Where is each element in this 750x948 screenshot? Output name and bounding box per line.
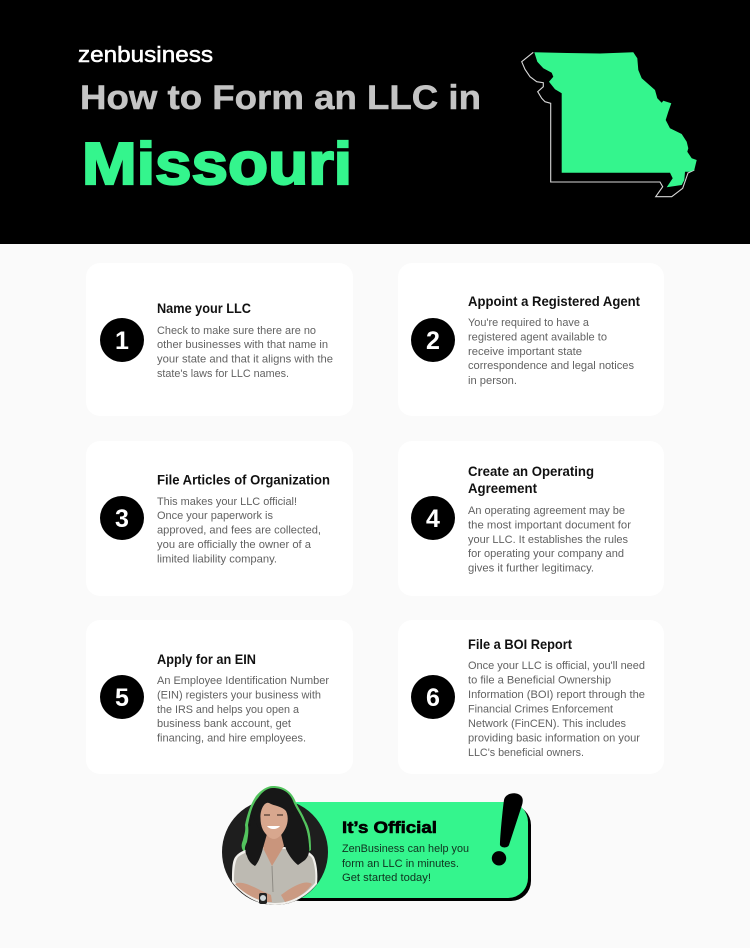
heading: Name your LLC: Name your LLC	[157, 301, 251, 316]
text block: step 3: limited liability company.	[157, 554, 277, 566]
text block: step 4: An operating agreement may be	[468, 505, 625, 517]
text block: step 2: receive important state	[468, 346, 582, 358]
panel: step 6	[398, 620, 664, 774]
text block: step 1: state's laws for LLC names.	[157, 368, 289, 380]
text block: step 4: your LLC. It establishes the rules	[468, 534, 628, 546]
icon: exclamation mark	[492, 793, 523, 866]
heading: File Articles of Organization: File Articles of Organization	[157, 472, 330, 488]
number badge 2: 2	[426, 327, 440, 355]
text block: step 1	[157, 325, 333, 380]
number badge 3	[100, 496, 144, 540]
text block: step 6: Once your LLC is official, you'll need	[468, 660, 645, 672]
panel: step 1	[86, 263, 353, 416]
callout text	[342, 843, 469, 884]
number badge 3: 3	[115, 505, 129, 533]
text block: step 2: You're required to have a	[468, 317, 590, 329]
text block: step 1: other businesses with that name in	[157, 339, 328, 351]
wristwatch	[259, 893, 267, 904]
text block: step 3	[157, 496, 321, 566]
number badge 1	[100, 318, 144, 362]
number badge 5: 5	[115, 684, 129, 712]
title line: How to Form an LLC in	[80, 79, 481, 117]
text block: step 5: An Employee Identification Number	[157, 675, 329, 687]
text block: step 3: approved, and fees are collected,	[157, 524, 321, 536]
text block: step 4: the most important document for	[468, 520, 631, 532]
text block: step 5	[157, 675, 329, 744]
number badge 6: 6	[426, 684, 440, 712]
text block: step 6	[468, 660, 645, 759]
callout text: Get started today!	[342, 872, 431, 884]
text block: step 4	[468, 505, 631, 574]
front hair locks	[245, 812, 309, 866]
heading: It's Official: It’s Official	[342, 818, 437, 837]
text block: step 6: to file a Beneficial Ownership	[468, 674, 611, 686]
icon: Missouri map	[522, 52, 697, 197]
hair glow	[242, 786, 311, 858]
text block: step 6: Financial Crimes Enforcement	[468, 704, 614, 716]
text block: step 4: for operating your company and	[468, 548, 624, 560]
panel: step 4	[398, 441, 664, 596]
face	[260, 803, 288, 839]
text block: step 5: business bank account, get	[157, 718, 292, 730]
text block: step 2: correspondence and legal notices	[468, 360, 634, 372]
title: Missouri: Missouri	[82, 131, 352, 197]
portrait: smiling woman	[222, 786, 328, 905]
callout text: form an LLC in minutes.	[342, 858, 459, 870]
callout text: ZenBusiness can help you	[342, 843, 469, 855]
number badge 1: 1	[115, 327, 129, 355]
text block: step 6: Network (FinCEN). This includes	[468, 718, 626, 730]
text block: step 5: the IRS and helps you open a	[157, 704, 300, 716]
text block: step 3: This makes your LLC official!	[157, 496, 297, 508]
text block: step 5: (EIN) registers your business with	[157, 690, 321, 702]
callout: It's Official	[222, 786, 531, 905]
text block: step 3: Once your paperwork is	[157, 510, 273, 522]
text block: step 4: gives it further legitimacy.	[468, 562, 594, 574]
text block: step 1: your state and that it aligns with the	[157, 354, 333, 366]
panel: step 2	[398, 263, 664, 416]
panel: step 3	[86, 441, 353, 596]
number badge 4	[411, 496, 455, 540]
heading: Appoint a Registered Agent: Appoint a Registered Agent	[468, 294, 640, 309]
text block: step 2	[468, 317, 634, 387]
hair back	[245, 788, 309, 858]
number badge 5	[100, 675, 144, 719]
heading: Apply for an EIN: Apply for an EIN	[157, 652, 256, 667]
text block: step 2: in person.	[468, 375, 517, 387]
facial features	[264, 815, 283, 829]
banner	[277, 802, 528, 898]
text block: step 6: providing basic information on your	[468, 732, 640, 744]
number badge 4: 4	[426, 505, 440, 533]
number badge 6	[411, 675, 455, 719]
panel: step 5	[86, 620, 353, 774]
heading: Create an Operating Agreement	[468, 464, 594, 496]
text block: step 3: you are officially the owner of a	[157, 539, 312, 551]
heading: File a BOI Report: File a BOI Report	[468, 637, 572, 652]
logo: zenbusiness: zenbusiness	[78, 42, 213, 67]
text block: step 5: financing, and hire employees.	[157, 732, 306, 744]
header band	[0, 0, 750, 244]
heading: Create an Operating Agreement: Agreement	[468, 481, 537, 496]
shirt placket	[272, 866, 273, 892]
text block: step 2: registered agent available to	[468, 332, 607, 344]
banner shadow	[280, 805, 531, 901]
shirt	[232, 847, 317, 905]
neck	[263, 834, 284, 866]
crossed arms	[235, 883, 272, 902]
text block: step 6: Information (BOI) report through the	[468, 689, 645, 701]
number badge 2	[411, 318, 455, 362]
heading: Create an Operating Agreement: Create an Operating	[468, 464, 594, 479]
text block: step 1: Check to make sure there are no	[157, 325, 316, 337]
text block: step 6: LLC's beneficial owners.	[468, 747, 584, 759]
